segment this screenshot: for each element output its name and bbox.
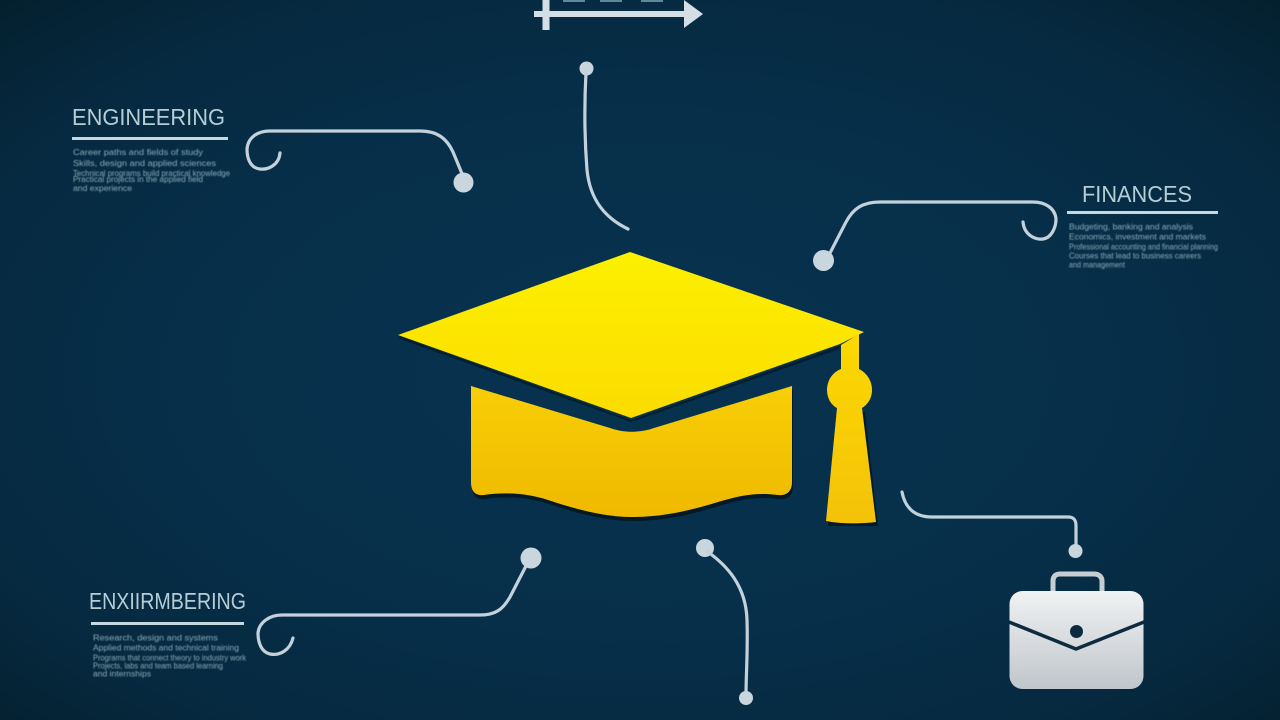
body text: Budgeting, banking and analysis [1069, 222, 1193, 232]
body text: Applied methods and technical training [93, 644, 239, 652]
connector: top [580, 62, 628, 229]
panel: finances, right [1067, 181, 1218, 270]
body text: and internships [93, 670, 151, 678]
body text: Career paths and fields of study [73, 148, 203, 157]
body text: Programs that connect theory to industry work [93, 654, 247, 662]
mortarboard [398, 252, 864, 418]
heading: FINANCES [1082, 181, 1192, 207]
body text: Economics, investment and markets [1069, 232, 1206, 242]
tassel shadow [828, 412, 878, 526]
heading rule [1067, 211, 1218, 214]
connector: bottom centre [696, 539, 753, 705]
connector: engineering [247, 131, 474, 192]
body text: Professional accounting and financial planning [1069, 242, 1218, 252]
body text: Skills, design and applied sciences [73, 159, 216, 168]
icon: graduation cap [398, 252, 878, 526]
heading: ENGINEERING [72, 104, 225, 130]
arrow: top, cropped [534, 0, 703, 30]
body text: Research, design and systems [93, 634, 218, 642]
body text [1069, 222, 1218, 270]
mortarboard shadow [399, 336, 840, 422]
body text: Projects, labs and team based learning [93, 662, 223, 670]
body text: and management [1069, 260, 1126, 270]
body text: Practical projects in the applied field [73, 175, 203, 184]
heading rule [72, 137, 228, 140]
cap base with wavy hem [471, 386, 793, 521]
connector: finances [813, 202, 1056, 271]
body text: Courses that lead to business careers [1069, 252, 1201, 260]
connector: briefcase [902, 492, 1082, 558]
heading: ENXIIRMBERING [89, 588, 246, 614]
panel: engineering, bottom left [89, 588, 247, 678]
icon: briefcase [1009, 574, 1144, 689]
heading rule [91, 622, 244, 625]
tassel [826, 334, 876, 523]
connector: bottom left [258, 548, 542, 654]
body text: Technical programs build practical knowledge [73, 169, 231, 178]
body text [93, 634, 247, 678]
body text [73, 148, 231, 193]
panel: engineering, top left [72, 104, 231, 193]
body text: and experience [73, 184, 133, 193]
